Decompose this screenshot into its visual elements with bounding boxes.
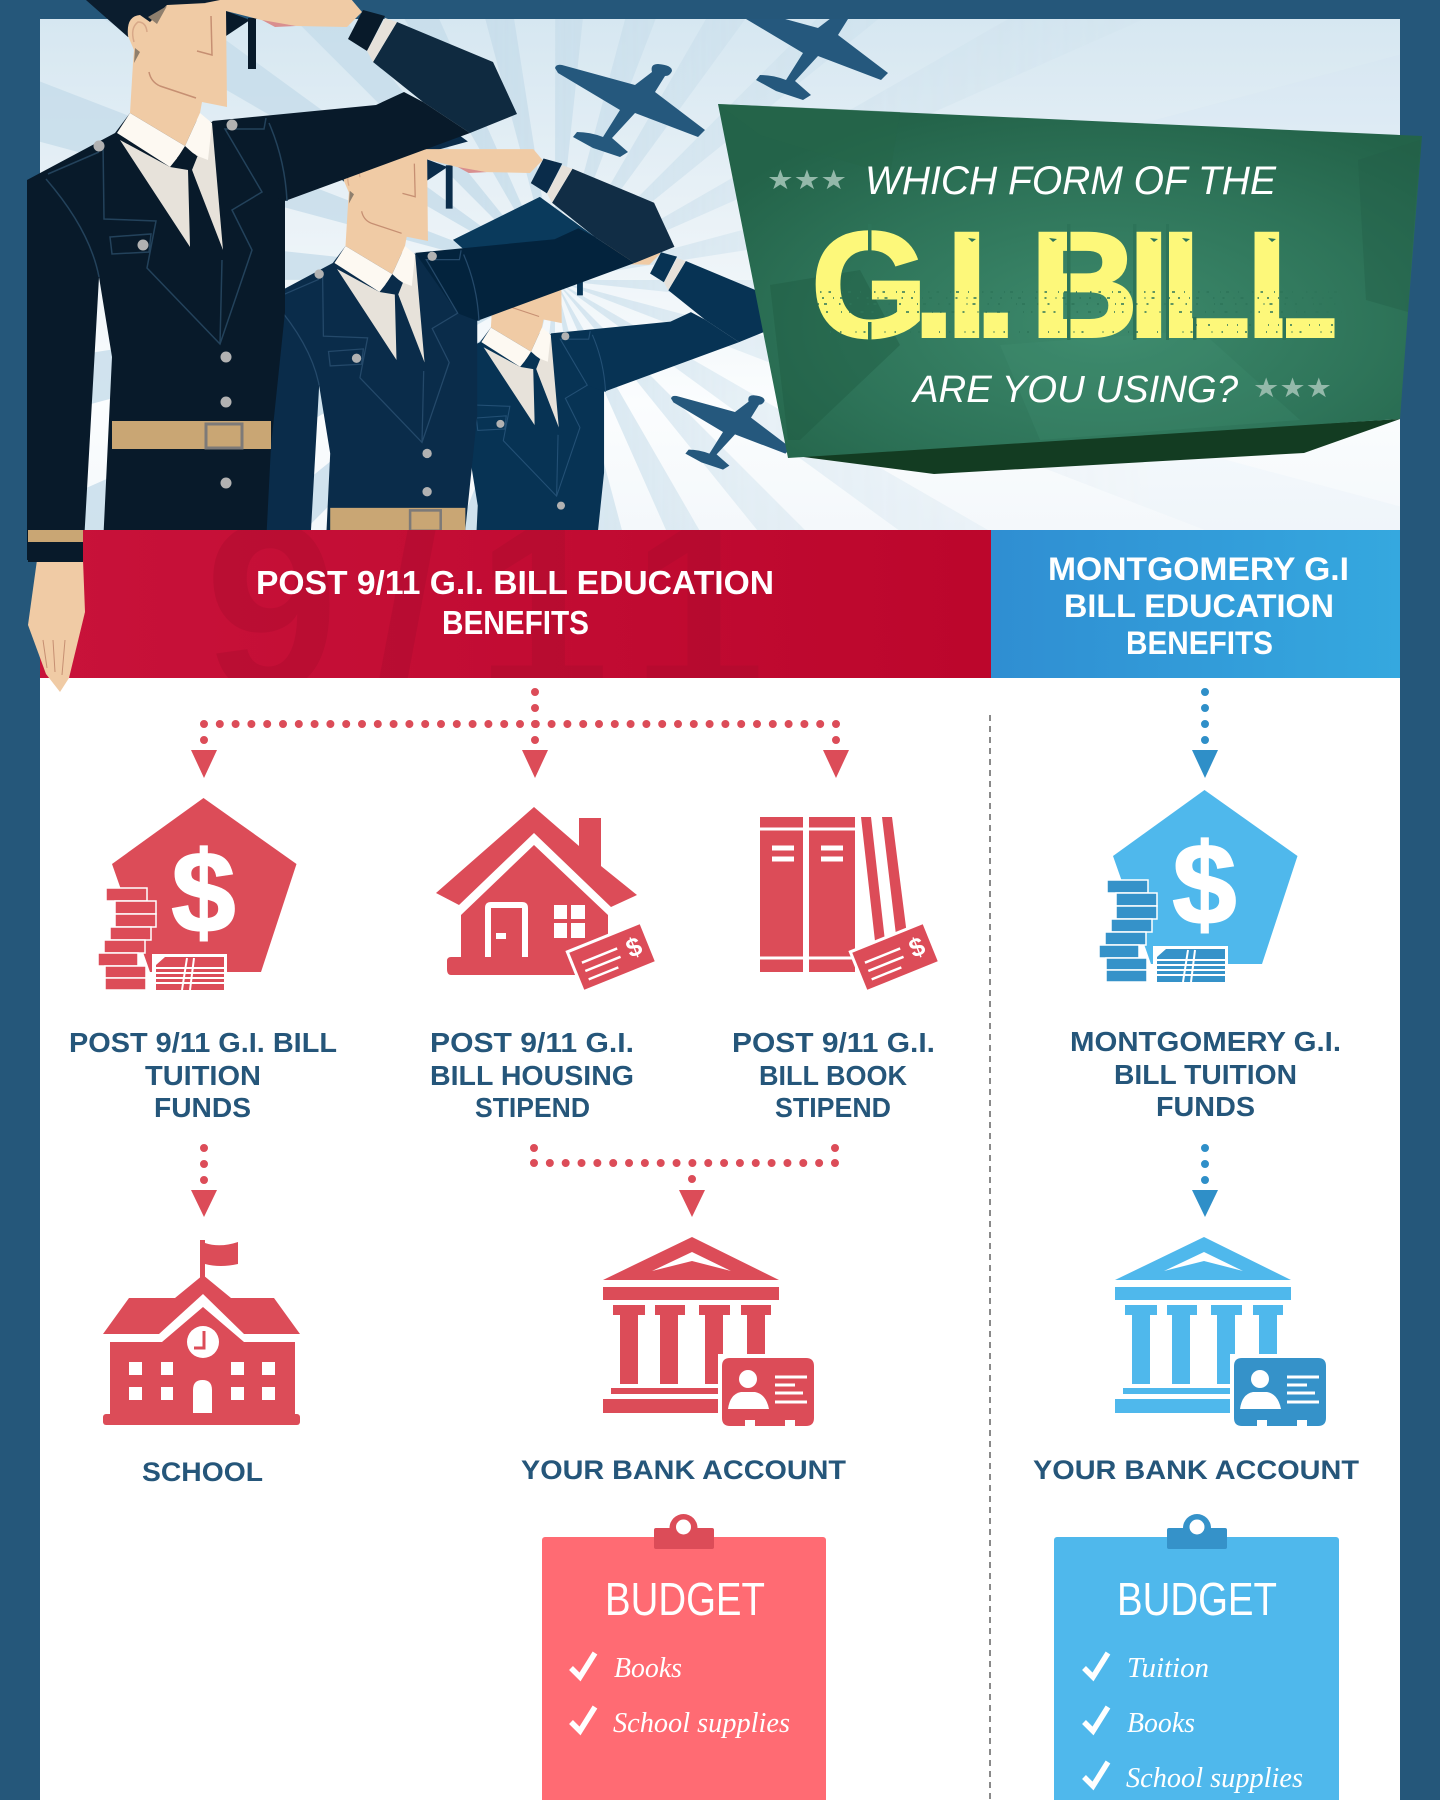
label: your bank account, blue column: YOUR BANK ACCOUNT: [1033, 1455, 1360, 1485]
soldier one: [27, 0, 517, 560]
label: post 9/11 book stipend: [732, 1027, 935, 1123]
checklist, blue: School supplies: [1126, 1763, 1303, 1794]
connector: montgomery tuition to bank: [1192, 1148, 1218, 1217]
checklist, red: [571, 1653, 790, 1739]
checklist, red: Books: [614, 1653, 682, 1684]
label: montgomery tuition funds: BILL TUITION: [1114, 1059, 1297, 1090]
connector: montgomery down: [1192, 692, 1218, 778]
connector: tuition to school: [191, 1148, 217, 1217]
panel: post 9/11 header: 9/11: [205, 473, 765, 741]
label: post 9/11 book stipend: STIPEND: [775, 1092, 891, 1123]
icon: books with cheque: $: [905, 930, 930, 964]
icon: bank, red: [603, 1237, 820, 1430]
plane two: [746, 19, 888, 100]
icon: tuition funds, red: [98, 798, 296, 992]
divider between columns: [989, 715, 991, 1800]
label: post 9/11 tuition funds: TUITION: [145, 1060, 261, 1091]
icon: bank, blue: [1115, 1237, 1332, 1430]
panel: montgomery header: MONTGOMERY G.I: [1048, 551, 1349, 587]
checklist, blue: Books: [1127, 1708, 1195, 1739]
panel: montgomery header: BENEFITS: [1126, 625, 1273, 661]
label: post 9/11 housing stipend: BILL HOUSING: [430, 1060, 634, 1091]
banner heading line one: ★★★: [767, 165, 847, 196]
checklist, red: School supplies: [613, 1708, 790, 1739]
label: post 9/11 book stipend: POST 9/11 G.I.: [732, 1027, 935, 1058]
icon: tuition funds, blue: [1099, 790, 1298, 984]
checklist, blue: [1084, 1653, 1303, 1794]
icon: books with cheque: [760, 817, 942, 994]
label: post 9/11 book stipend: BILL BOOK: [759, 1060, 907, 1091]
panel: montgomery header: BILL EDUCATION: [1064, 588, 1334, 624]
icon: house with cheque: [436, 807, 659, 994]
banner heading: G.I. BILL: G.I.BILL: [811, 200, 1338, 368]
label: montgomery tuition funds: MONTGOMERY G.I.: [1070, 1026, 1341, 1057]
label: post 9/11 housing stipend: [430, 1027, 634, 1123]
panel: post 9/11 header: BENEFITS: [442, 604, 589, 641]
plane three: [671, 395, 791, 470]
panel: montgomery header: [991, 530, 1400, 678]
connector: post 9/11 split to three: [191, 692, 849, 778]
label: post 9/11 tuition funds: [69, 1027, 337, 1123]
connector: stipends to bank: [534, 1148, 837, 1217]
panel: red budget clipboard: BUDGET: [605, 1573, 765, 1625]
icon: house with cheque: $: [622, 930, 647, 964]
icon: school: [103, 1240, 300, 1425]
label: post 9/11 tuition funds: FUNDS: [154, 1092, 251, 1123]
title banner: [718, 104, 1422, 474]
banner heading line three: ARE YOU USING?: [911, 369, 1239, 411]
clipboard clip, blue: [1167, 1514, 1227, 1549]
label: post 9/11 tuition funds: POST 9/11 G.I. BILL: [69, 1027, 337, 1058]
label: school: SCHOOL: [142, 1457, 263, 1487]
panel: red budget clipboard: [542, 1514, 826, 1800]
label: montgomery tuition funds: [1070, 1026, 1341, 1122]
checklist, blue: Tuition: [1127, 1653, 1209, 1684]
label: post 9/11 housing stipend: STIPEND: [475, 1092, 590, 1123]
plane one: [555, 64, 705, 157]
soldier three: [416, 197, 773, 654]
banner heading line one: WHICH FORM OF THE: [865, 159, 1277, 203]
saluting arm sleeve and hand over header: [28, 525, 85, 692]
panel: blue budget clipboard: [1054, 1514, 1339, 1800]
clipboard clip, red: [654, 1514, 714, 1549]
hero illustration: sky, rays and planes: [40, 19, 1400, 530]
panel: post 9/11 header: POST 9/11 G.I. BILL EDUCATION: [256, 564, 774, 601]
label: post 9/11 housing stipend: POST 9/11 G.I.: [430, 1027, 634, 1058]
label: montgomery tuition funds: FUNDS: [1156, 1091, 1255, 1122]
soldier two: [258, 94, 674, 626]
panel: blue budget clipboard: BUDGET: [1117, 1573, 1277, 1625]
banner heading line three: ★★★: [1253, 373, 1332, 404]
label: your bank account, red column: YOUR BANK ACCOUNT: [521, 1455, 847, 1485]
panel: post 9/11 header: [40, 530, 991, 678]
